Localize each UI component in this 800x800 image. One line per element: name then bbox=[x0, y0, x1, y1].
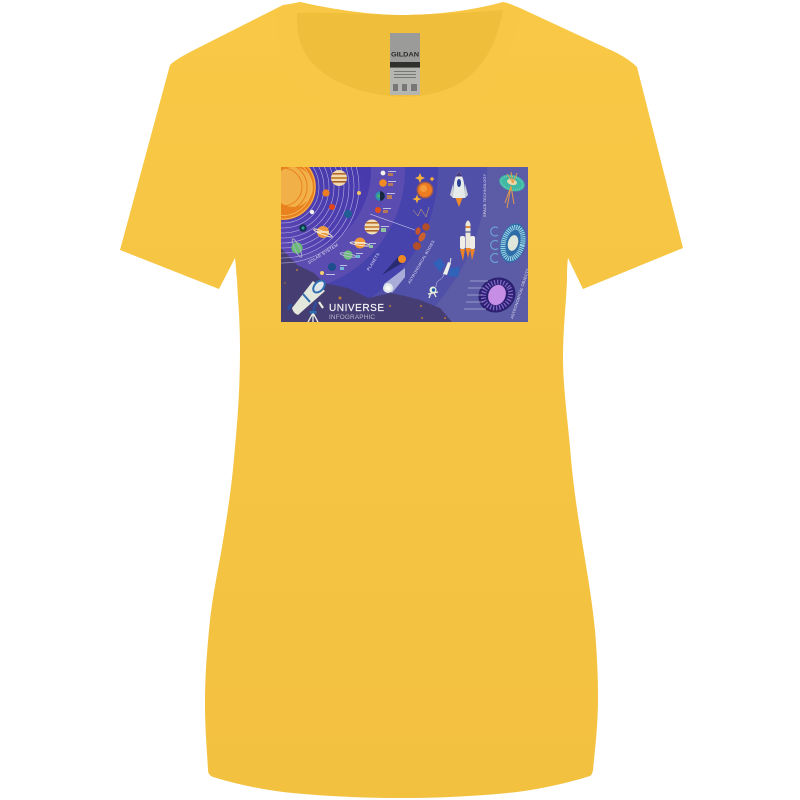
orbit rings bbox=[281, 167, 360, 264]
blue gauge arcs bbox=[491, 227, 498, 263]
heading: planets: PLANETS bbox=[366, 252, 381, 272]
constellation bbox=[413, 207, 429, 217]
teal accretion disc bbox=[497, 172, 527, 208]
neck label: Gildan bbox=[390, 33, 420, 95]
stars and orange body bbox=[412, 173, 434, 204]
dark hill bbox=[281, 248, 452, 322]
telescope bbox=[288, 277, 328, 322]
solar system planets bbox=[291, 170, 361, 258]
collar rib bbox=[277, 2, 520, 118]
title: universe: UNIVERSE bbox=[329, 303, 384, 314]
rocket two bbox=[460, 220, 475, 261]
spiral galaxy bbox=[500, 223, 526, 263]
printed universe infographic bbox=[281, 167, 528, 322]
purple galaxy bbox=[464, 278, 516, 312]
tiny planet captions bbox=[326, 171, 415, 275]
comet bbox=[383, 268, 405, 293]
heading: astronomical bodies: ASTRONOMICAL BODIES bbox=[407, 239, 436, 284]
heading: space technology: SPACE TECHNOLOGY bbox=[483, 173, 487, 217]
subtitle: infographic: INFOGRAPHIC bbox=[329, 314, 375, 321]
neck label: Gildan: GILDAN bbox=[391, 52, 419, 58]
rocket one bbox=[450, 171, 468, 207]
background bands bbox=[281, 167, 528, 322]
shirt body bbox=[120, 2, 683, 798]
t-shirt mockup bbox=[120, 2, 683, 798]
heading: solar system: SOLAR SYSTEM bbox=[307, 242, 339, 265]
small stars on hill bbox=[284, 269, 446, 319]
meteor bbox=[382, 255, 406, 275]
sun bbox=[281, 167, 316, 220]
satellite bbox=[433, 258, 460, 277]
neck interior bbox=[297, 10, 503, 97]
asteroids bbox=[413, 223, 430, 250]
heading: astronomical objects: ASTRONOMICAL OBJECTS bbox=[510, 268, 530, 319]
planets column bbox=[320, 171, 387, 275]
astronaut bbox=[428, 274, 444, 298]
